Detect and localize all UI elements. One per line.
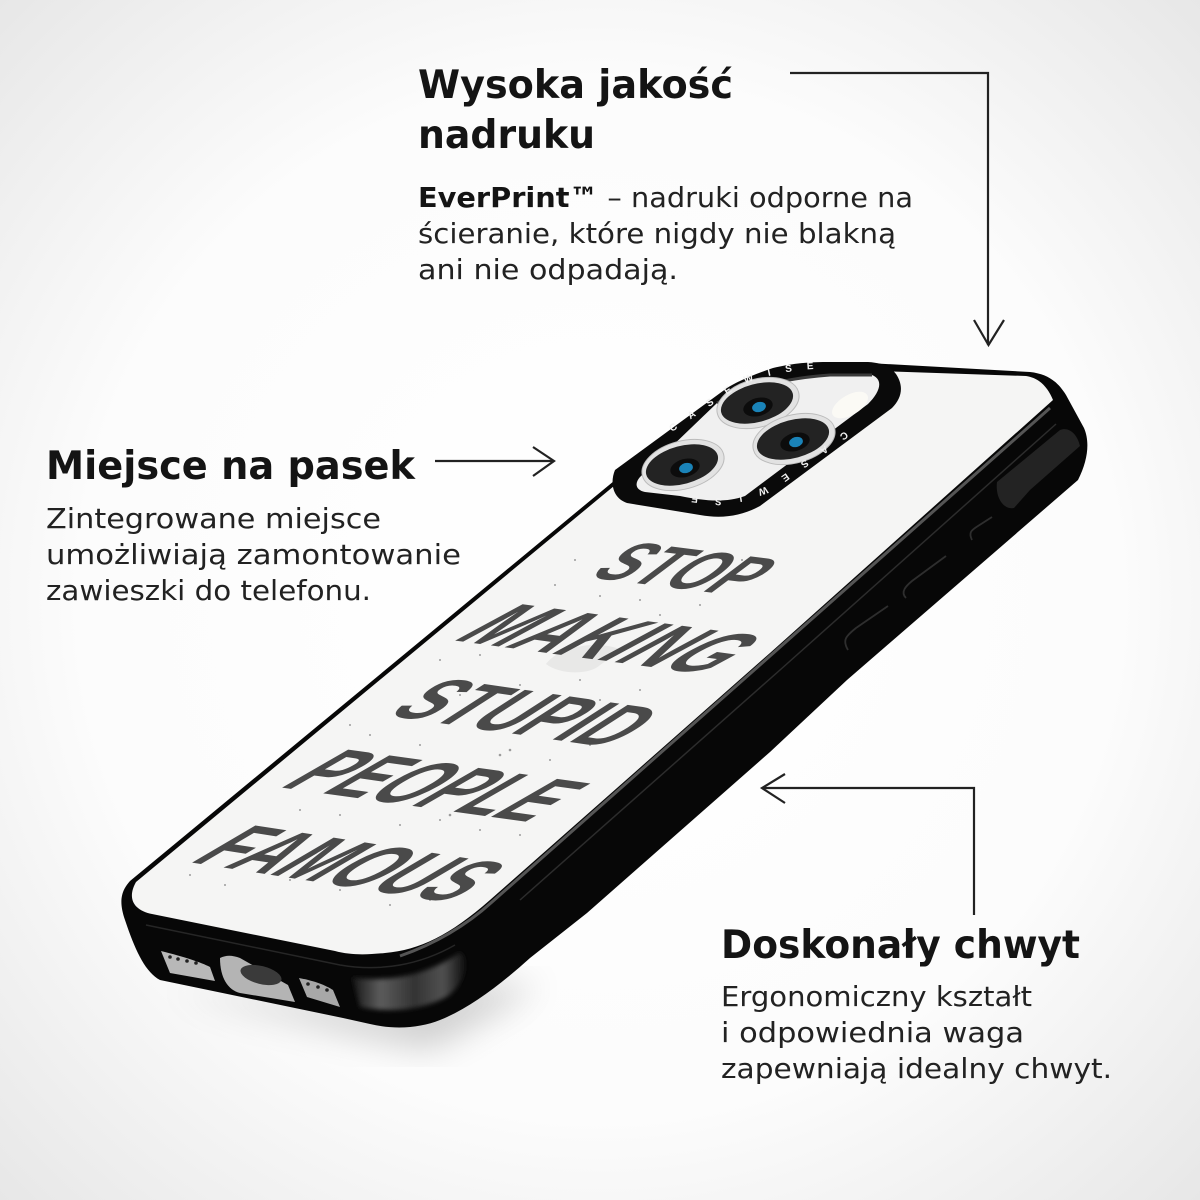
print: STOP MAKING STUPID PEOPLE FAMOUS: STOP — [572, 532, 797, 607]
print: STOP MAKING STUPID PEOPLE FAMOUS: FAMOUS — [167, 814, 532, 915]
side groove — [520, 424, 1056, 900]
print: STOP MAKING STUPID PEOPLE FAMOUS: STUPID — [366, 667, 685, 760]
ring inner edge shading — [717, 375, 872, 403]
text: grip description: zapewniają idealny chwyt. — [721, 1052, 1112, 1085]
text: strap description — [46, 502, 461, 607]
port: charging — [220, 956, 295, 1002]
print: STOP MAKING STUPID PEOPLE FAMOUS: PEOPLE — [257, 737, 614, 834]
text: strap description: Zintegrowane miejsce — [46, 502, 381, 535]
port: left speaker — [161, 951, 215, 981]
ring lettering: top: CASEWISE — [670, 362, 814, 431]
heading: Wysoka jakość nadruku — [418, 63, 733, 158]
text: grip description: i odpowiednia waga — [721, 1016, 1024, 1049]
flash — [828, 386, 872, 424]
heading: Miejsce na pasek: Miejsce na pasek — [46, 444, 416, 489]
back face — [132, 370, 1053, 954]
arrow: print quality to phone — [790, 73, 1004, 345]
side buttons — [845, 517, 992, 650]
heading block: print quality — [418, 63, 913, 286]
lens: right — [747, 405, 841, 473]
phone shadow — [170, 985, 540, 1048]
heading block: grip — [721, 923, 1112, 1085]
lens: left — [636, 431, 730, 499]
camera module — [612, 362, 901, 517]
camera ring — [613, 362, 901, 517]
lens: top — [711, 369, 805, 437]
text: grip description — [721, 980, 1112, 1085]
port: right speaker — [299, 978, 340, 1007]
phone case body — [121, 362, 1087, 1027]
heading: Wysoka jakość nadruku: nadruku — [418, 113, 595, 158]
text: EverPrint description: EverPrint™ – nadruki odporne na — [418, 181, 913, 214]
arrow: grip to phone side — [762, 774, 974, 915]
heading block: strap mount — [46, 444, 461, 607]
print: STOP MAKING STUPID PEOPLE FAMOUS: MAKING — [430, 592, 793, 686]
print: STOP MAKING STUPID PEOPLE FAMOUS — [167, 532, 797, 915]
text: grip description: Ergonomiczny kształt — [721, 980, 1032, 1013]
text: EverPrint description: ani nie odpadają. — [418, 253, 678, 286]
phone — [121, 362, 1088, 1028]
heading: Wysoka jakość nadruku: Wysoka jakość — [418, 63, 733, 108]
arrow: strap mount to phone — [435, 447, 554, 476]
camera glass — [637, 375, 879, 501]
text: strap description: zawieszki do telefonu. — [46, 574, 371, 607]
print specks — [189, 559, 743, 906]
side bevel highlight — [400, 408, 1050, 956]
side key: action area — [997, 429, 1080, 508]
apple logo smudge — [546, 645, 622, 672]
text: EverPrint description: ścieranie, które nigdy nie blakną — [418, 217, 896, 250]
text: EverPrint description — [418, 181, 913, 286]
text: strap description: umożliwiają zamontowanie — [46, 538, 461, 571]
heading: Doskonały chwyt: Doskonały chwyt — [721, 923, 1080, 968]
bottom lip groove — [146, 925, 455, 968]
ring lettering: bottom: CASEWISE — [692, 432, 848, 506]
glossy bottom corner — [352, 952, 466, 1010]
